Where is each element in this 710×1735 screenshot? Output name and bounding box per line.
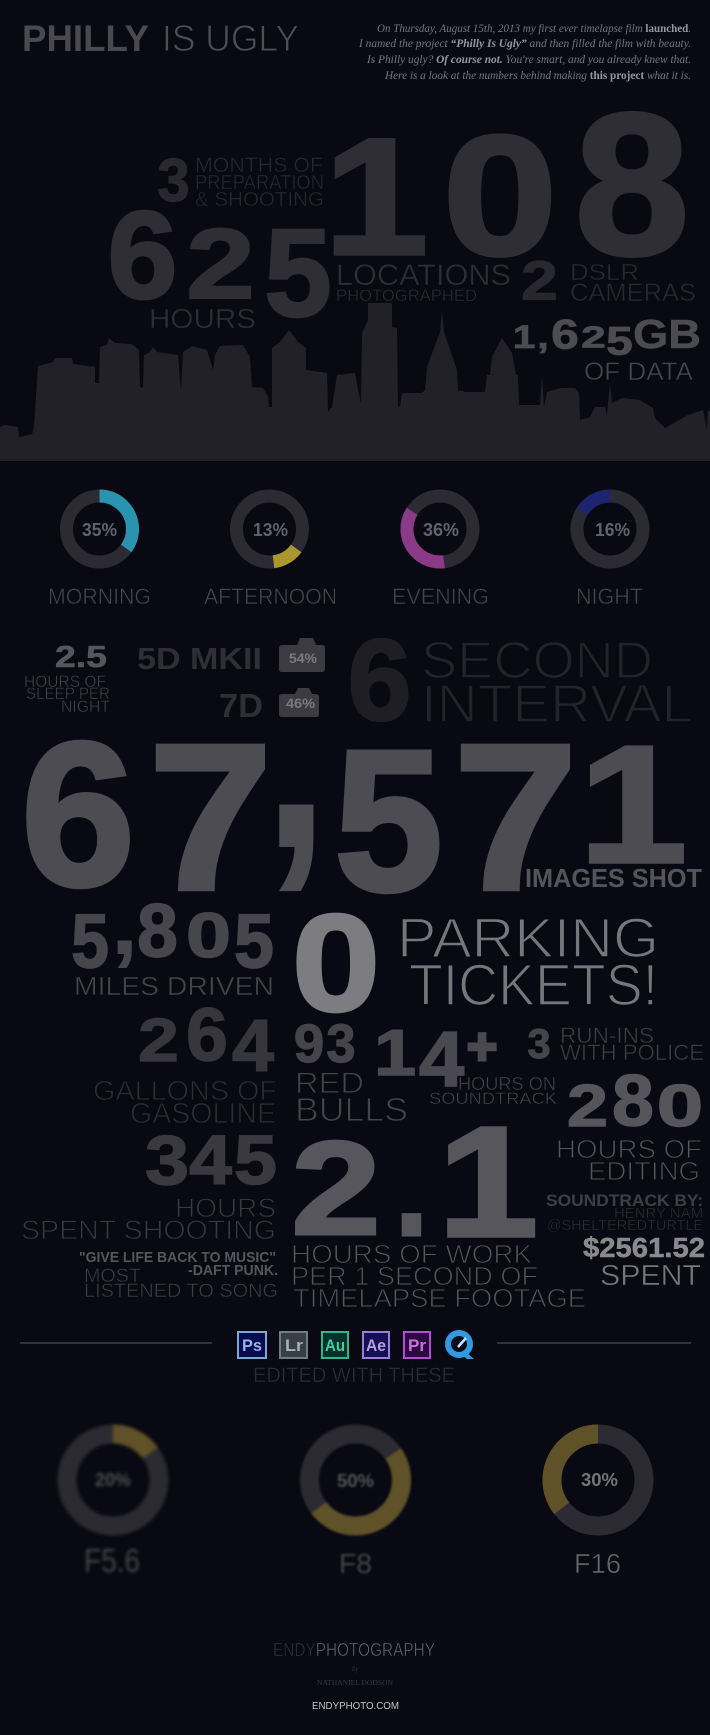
stat: 264 gallons of gasoline: 4 bbox=[232, 1005, 274, 1087]
stat: 3 run-ins with police bbox=[527, 1020, 704, 1067]
stat: 5,805 miles driven: 5 bbox=[71, 900, 109, 985]
stat: 0 parking tickets: 0 bbox=[292, 885, 380, 1040]
stat: 5,805 miles driven: 8 bbox=[137, 888, 178, 973]
donut: afternoon 13%: AFTERNOON bbox=[204, 584, 337, 609]
stat: 625 hours: 5 bbox=[264, 203, 332, 342]
stat: 1,625GB of data: 2 bbox=[581, 320, 606, 355]
stat: 0 parking tickets bbox=[292, 885, 659, 1040]
donut: F16 30% bbox=[533, 1415, 663, 1579]
callout: most listened to song: LISTENED TO SONG bbox=[84, 1281, 278, 1302]
footer logo: NATHANIEL DODSON bbox=[317, 1679, 393, 1687]
camera share: 5D MKII 54%: 5D MKII bbox=[137, 641, 262, 676]
stat: 280 hours of editing: 2 bbox=[567, 1074, 608, 1139]
donut: night 16% bbox=[564, 483, 656, 609]
stat: 108 locations photographed: PHOTOGRAPHED bbox=[336, 286, 477, 305]
intro paragraph: I named the project “Philly Is Ugly” and then filled the film with beauty. bbox=[358, 36, 691, 50]
stat: 2.1 hours of work per second: 2 bbox=[291, 1114, 381, 1263]
stat: 67,571 images shot: 7 bbox=[454, 701, 577, 933]
icon: camera 7D bbox=[279, 688, 319, 717]
stat: 14+ hours on soundtrack: 4 bbox=[419, 1015, 464, 1103]
stat: 93 red bulls: BULLS bbox=[295, 1091, 408, 1128]
stat: 93 red bulls: 9 bbox=[294, 1014, 324, 1074]
stat: $2561.52 spent: $2561.52 bbox=[583, 1232, 705, 1263]
icon: Photoshop: Ps bbox=[242, 1336, 262, 1355]
stat: $2561.52 spent: SPENT bbox=[600, 1260, 701, 1292]
stat: 108 locations photographed: LOCATIONS bbox=[336, 259, 511, 292]
donut: afternoon 13% bbox=[204, 483, 337, 609]
stat: 108 locations photographed: 8 bbox=[575, 72, 689, 298]
icon: Photoshop bbox=[238, 1332, 266, 1358]
stat: 5,805 miles driven: , bbox=[111, 872, 138, 974]
stat: 2.5 hours of sleep: NIGHT bbox=[61, 697, 110, 716]
stat: 2 DSLR cameras bbox=[521, 250, 696, 311]
stat: 108 locations photographed bbox=[324, 72, 689, 305]
stat: 264 gallons of gasoline: GALLONS OF bbox=[93, 1075, 277, 1106]
stat: 14+ hours on soundtrack: 1 bbox=[374, 1016, 416, 1089]
stat: 3 months of preparation and shooting: PREPARATION bbox=[195, 172, 324, 194]
stat: 264 gallons of gasoline: 2 bbox=[138, 1006, 179, 1075]
stat: 2.1 hours of work per second bbox=[291, 1094, 586, 1313]
donut: night 16%: 16% bbox=[595, 520, 630, 540]
stat: 0 parking tickets: TICKETS! bbox=[409, 953, 658, 1018]
donut: morning 35% bbox=[48, 496, 151, 609]
stat: 5,805 miles driven: 5 bbox=[234, 899, 274, 984]
donut: F5.6 20%: F5.6 bbox=[84, 1542, 140, 1579]
camera share: 7D 46% bbox=[219, 687, 319, 724]
stat: 14+ hours on soundtrack: HOURS ON bbox=[458, 1074, 556, 1094]
stat: 67,571 images shot: 7 bbox=[149, 701, 272, 933]
stat: 1,625GB of data: 1 bbox=[513, 319, 535, 355]
stat: 345 hours spent shooting bbox=[21, 1121, 277, 1245]
stat: 93 red bulls: 3 bbox=[326, 1015, 356, 1074]
stat: 264 gallons of gasoline: GASOLINE bbox=[130, 1098, 276, 1130]
donut: F8 50% bbox=[291, 1416, 420, 1579]
stat: 345 hours spent shooting: 5 bbox=[234, 1121, 277, 1199]
donut: evening 36%: 36% bbox=[423, 520, 459, 540]
stat: 1,625GB of data: , bbox=[537, 319, 549, 355]
software icons bbox=[238, 1332, 474, 1359]
stat: 1,625GB of data bbox=[513, 311, 701, 386]
icon: Premiere: Pr bbox=[408, 1336, 426, 1355]
stat: 2 DSLR cameras: 2 bbox=[521, 250, 558, 311]
stat: 280 hours of editing: HOURS OF bbox=[556, 1134, 702, 1164]
donut: F5.6 20%: 20% bbox=[95, 1470, 131, 1490]
stat: 3 run-ins with police: RUN-INS bbox=[560, 1023, 654, 1048]
stat: 6 second interval: INTERVAL bbox=[421, 674, 693, 734]
intro paragraph: On Thursday, August 15th, 2013 my first ever timelapse film launched. bbox=[377, 21, 691, 35]
stat: 2.5 hours of sleep: 2.5 bbox=[55, 639, 107, 674]
donut: F8 50%: 50% bbox=[337, 1471, 374, 1491]
stat: 280 hours of editing: 8 bbox=[612, 1061, 654, 1141]
stat: $2561.52 spent bbox=[583, 1232, 705, 1292]
stat: 2.5 hours of sleep: HOURS OF bbox=[24, 672, 106, 691]
icon: Audition bbox=[322, 1332, 348, 1358]
stat: 280 hours of editing: EDITING bbox=[588, 1156, 700, 1186]
stat: 67,571 images shot: IMAGES SHOT bbox=[525, 863, 702, 893]
stat: 1,625GB of data: OF DATA bbox=[584, 358, 693, 386]
callout: most listened to song: "GIVE LIFE BACK TO MUSIC" bbox=[79, 1249, 276, 1266]
callout: most listened to song: MOST bbox=[84, 1266, 141, 1287]
stat: 3 run-ins with police: 3 bbox=[527, 1020, 551, 1067]
stat: 2.1 hours of work per second: TIMELAPSE FOOTAGE bbox=[293, 1283, 586, 1313]
stat: 2 DSLR cameras: DSLR bbox=[570, 259, 639, 285]
donut: night 16%: NIGHT bbox=[576, 584, 643, 609]
stat: 67,571 images shot bbox=[21, 591, 702, 933]
stat: 5,805 miles driven: MILES DRIVEN bbox=[74, 971, 274, 1001]
callout: most listened to song bbox=[79, 1249, 278, 1302]
stat: 280 hours of editing: 0 bbox=[657, 1074, 703, 1139]
credit: soundtrack by: @SHELTEREDTURTLE bbox=[547, 1217, 703, 1234]
donut: afternoon 13%: 13% bbox=[253, 520, 288, 540]
camera share: 7D 46%: 46% bbox=[286, 695, 316, 711]
credit: soundtrack by: HENRY NAM bbox=[614, 1205, 703, 1222]
stat: 67,571 images shot: 5 bbox=[334, 708, 443, 933]
stat: 0 parking tickets: PARKING bbox=[397, 906, 659, 969]
stat: 93 red bulls: RED bbox=[295, 1067, 364, 1100]
stat: 625 hours: 6 bbox=[108, 186, 177, 325]
donut: evening 36% bbox=[392, 492, 489, 609]
footer logo: by bbox=[352, 1665, 360, 1673]
stat: 264 gallons of gasoline: 6 bbox=[186, 992, 228, 1076]
stat: 14+ hours on soundtrack bbox=[374, 1015, 558, 1108]
stat: 1,625GB of data: 6 bbox=[551, 311, 579, 358]
stat: 6 second interval: SECOND bbox=[421, 632, 653, 690]
stat: 67,571 images shot: 6 bbox=[21, 700, 135, 929]
stat: 2 DSLR cameras: CAMERAS bbox=[570, 279, 696, 307]
skyline silhouette bbox=[0, 303, 710, 461]
camera share: 5D MKII 54% bbox=[137, 638, 325, 676]
stat: 1,625GB of data: 5 bbox=[606, 319, 633, 364]
stat: 3 months of preparation and shooting: & SHOOTING bbox=[195, 189, 324, 211]
camera share: 5D MKII 54%: 54% bbox=[289, 650, 318, 666]
stat: 264 gallons of gasoline bbox=[93, 992, 277, 1130]
stat: 345 hours spent shooting: HOURS bbox=[175, 1193, 276, 1223]
stat: 5,805 miles driven: 0 bbox=[186, 901, 231, 971]
stat: 5,805 miles driven bbox=[71, 872, 274, 1001]
icon: After Effects bbox=[363, 1332, 389, 1358]
stat: 67,571 images shot: 1 bbox=[579, 710, 687, 898]
stat: 2.5 hours of sleep: SLEEP PER bbox=[26, 684, 110, 703]
stat: 2.1 hours of work per second: HOURS OF WORK bbox=[291, 1239, 533, 1269]
stat: 3 months of preparation and shooting bbox=[157, 146, 324, 214]
icon: Audition: Au bbox=[325, 1336, 345, 1355]
stat: 345 hours spent shooting: SPENT SHOOTING bbox=[21, 1215, 276, 1245]
footer logo: ENDYPHOTOGRAPHY bbox=[273, 1640, 435, 1660]
stat: 108 locations photographed: 0 bbox=[442, 100, 558, 291]
edited with these label: EDITED WITH THESE bbox=[253, 1364, 455, 1387]
stat: 2.1 hours of work per second: 1 bbox=[438, 1094, 538, 1269]
title bbox=[22, 18, 299, 59]
footer logo bbox=[273, 1640, 435, 1712]
donut: F16 30%: F16 bbox=[574, 1548, 621, 1579]
donut: morning 35%: 35% bbox=[82, 520, 117, 540]
credit: soundtrack by: SOUNDTRACK BY: bbox=[546, 1191, 703, 1210]
stat: 2.1 hours of work per second: . bbox=[393, 1100, 430, 1268]
stat: 625 hours: HOURS bbox=[149, 303, 256, 334]
intro paragraph: Is Philly ugly? Of course not. You're smart, and you already knew that. bbox=[366, 52, 691, 66]
stat: 3 months of preparation and shooting: 3 bbox=[157, 146, 190, 214]
footer logo: ENDYPHOTO.COM bbox=[312, 1700, 399, 1712]
donut: morning 35%: MORNING bbox=[48, 584, 151, 609]
icon: Lightroom bbox=[280, 1332, 307, 1358]
stat: 108 locations photographed: 1 bbox=[324, 104, 428, 290]
stat: 3 months of preparation and shooting: MONTHS OF bbox=[195, 154, 323, 177]
stat: 625 hours bbox=[108, 186, 332, 342]
donut: evening 36%: EVENING bbox=[392, 584, 489, 609]
stat: 67,571 images shot: , bbox=[262, 591, 330, 908]
stat: 6 second interval bbox=[348, 616, 693, 745]
stat: 3 run-ins with police: WITH POLICE bbox=[560, 1040, 704, 1065]
icon: After Effects: Ae bbox=[366, 1336, 386, 1355]
icon: camera 5D bbox=[279, 638, 325, 672]
intro paragraph bbox=[358, 21, 691, 82]
stat: 345 hours spent shooting: 3 bbox=[145, 1121, 189, 1199]
stat: 625 hours: 2 bbox=[186, 208, 255, 319]
stat: 14+ hours on soundtrack: SOUNDTRACK bbox=[429, 1089, 558, 1108]
stat: 1,625GB of data: GB bbox=[633, 311, 701, 357]
stat: 6 second interval: 6 bbox=[348, 616, 411, 745]
stat: 2.1 hours of work per second: PER 1 SECOND OF bbox=[291, 1261, 538, 1291]
intro paragraph: Here is a look at the numbers behind making this project what it is. bbox=[384, 68, 691, 82]
icon: QuickTime bbox=[448, 1333, 474, 1359]
camera share: 7D 46%: 7D bbox=[219, 687, 263, 724]
icon: Lightroom: Lr bbox=[285, 1336, 303, 1355]
stat: 14+ hours on soundtrack: + bbox=[467, 1018, 497, 1076]
title: IS UGLY bbox=[162, 18, 299, 59]
donut: F5.6 20% bbox=[67, 1434, 159, 1579]
icon: Premiere bbox=[404, 1332, 430, 1358]
stat: 345 hours spent shooting: 4 bbox=[189, 1121, 232, 1199]
donut: F16 30%: 30% bbox=[581, 1470, 618, 1490]
donut: F8 50%: F8 bbox=[339, 1548, 372, 1579]
credit: soundtrack by bbox=[546, 1191, 703, 1234]
stat: 2.5 hours of sleep bbox=[24, 639, 110, 716]
stat: 280 hours of editing bbox=[556, 1061, 703, 1186]
stat: 93 red bulls bbox=[294, 1014, 408, 1128]
title: PHILLY bbox=[22, 18, 149, 59]
callout: most listened to song: -DAFT PUNK. bbox=[188, 1262, 278, 1279]
